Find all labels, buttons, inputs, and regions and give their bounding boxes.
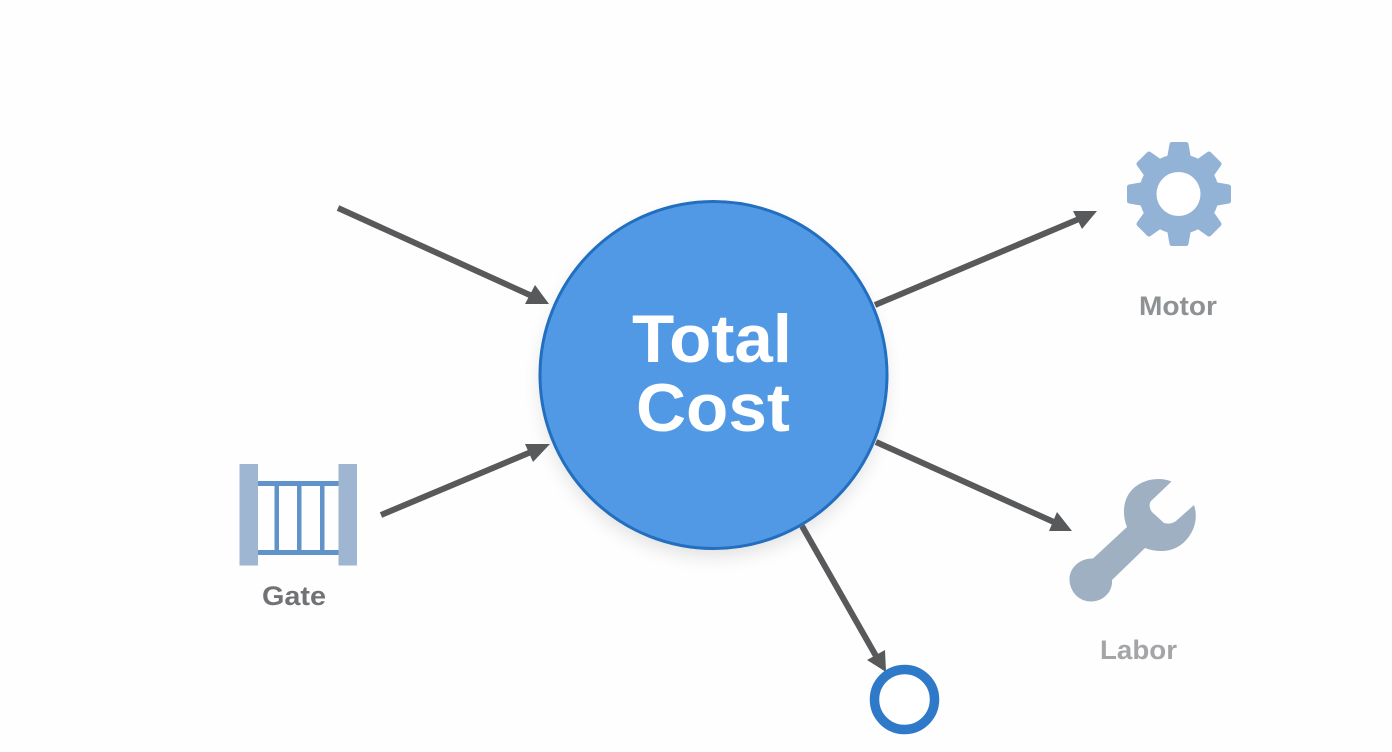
central circle: total cost	[540, 202, 887, 555]
central circle: total cost: Total	[632, 301, 792, 377]
label: gate: Gate	[262, 581, 326, 611]
arrow: top left into circle	[338, 208, 549, 304]
icon: labor wrench	[1069, 479, 1196, 602]
arrow: circle to labor	[876, 442, 1072, 531]
icon: motor gear	[1127, 142, 1231, 246]
label: labor: Labor	[1100, 635, 1177, 665]
arrow: circle to motor	[875, 211, 1097, 305]
arrow: gate into circle	[381, 444, 550, 515]
label: motor: Motor	[1139, 291, 1218, 321]
central circle: total cost: Cost	[636, 370, 790, 446]
icon: gate	[240, 464, 357, 566]
icon: bottom ring	[874, 670, 934, 730]
arrow: circle to bottom ring	[802, 526, 886, 672]
